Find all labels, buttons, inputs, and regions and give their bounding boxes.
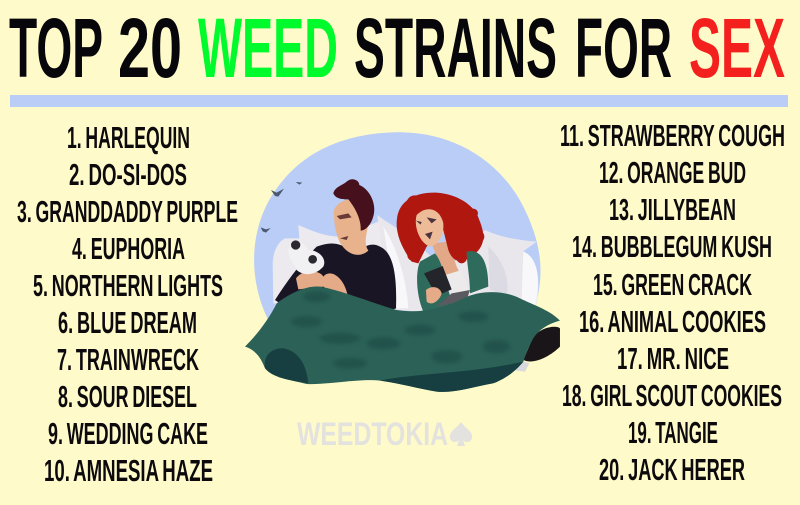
woman: face [416,209,443,247]
woman: neck and chest [432,242,460,277]
watermark: WEEDTOKIA [297,416,448,452]
woman: top [445,270,469,293]
strain list: left column: 10. AMNESIA HAZE [44,453,213,488]
strain list: left column: 5. NORTHERN LIGHTS [33,268,223,303]
man: hand and mug [288,240,347,296]
woman: hair [397,193,484,263]
icon: spade [450,422,472,446]
strain list: left column: 1. HARLEQUIN [67,120,190,155]
man: face shade [337,213,352,240]
strain list: left column: 4. EUPHORIA [72,231,185,266]
title: FOR [575,1,672,95]
illustration: couple in bed [245,132,560,392]
blanket folds and pattern [292,291,510,369]
woman: book and hand [424,266,452,303]
man: head [334,200,369,255]
background circle [254,132,541,320]
strain list: left column [17,120,238,488]
strain list: left column: 3. GRANDDADDY PURPLE [17,194,238,229]
woman: cardigan [417,251,488,312]
title: TOP [9,1,103,95]
shoe [523,327,560,361]
woman: eyes and mouth [416,217,437,239]
strain list: right column [560,118,785,487]
strain list: left column: 7. TRAINWRECK [57,342,199,377]
title [9,1,785,95]
strain list: right column: 19. TANGIE [628,415,718,450]
strain list: left column: 8. SOUR DIESEL [58,379,197,414]
strain list: right column: 17. MR. NICE [617,341,729,376]
man: sweater [275,243,396,317]
title: STRAINS [354,1,557,95]
title divider bar [10,95,788,107]
birds [261,182,302,233]
strain list: left column: 2. DO-SI-DOS [69,157,187,192]
blanket [245,286,560,392]
strain list: left column: 6. BLUE DREAM [58,305,197,340]
title: 20 [118,1,182,95]
title: WEED [198,1,338,95]
man: hair [333,179,374,231]
pillows [273,215,538,312]
strain list: left column: 9. WEDDING CAKE [48,416,208,451]
blanket shadow [265,348,523,392]
